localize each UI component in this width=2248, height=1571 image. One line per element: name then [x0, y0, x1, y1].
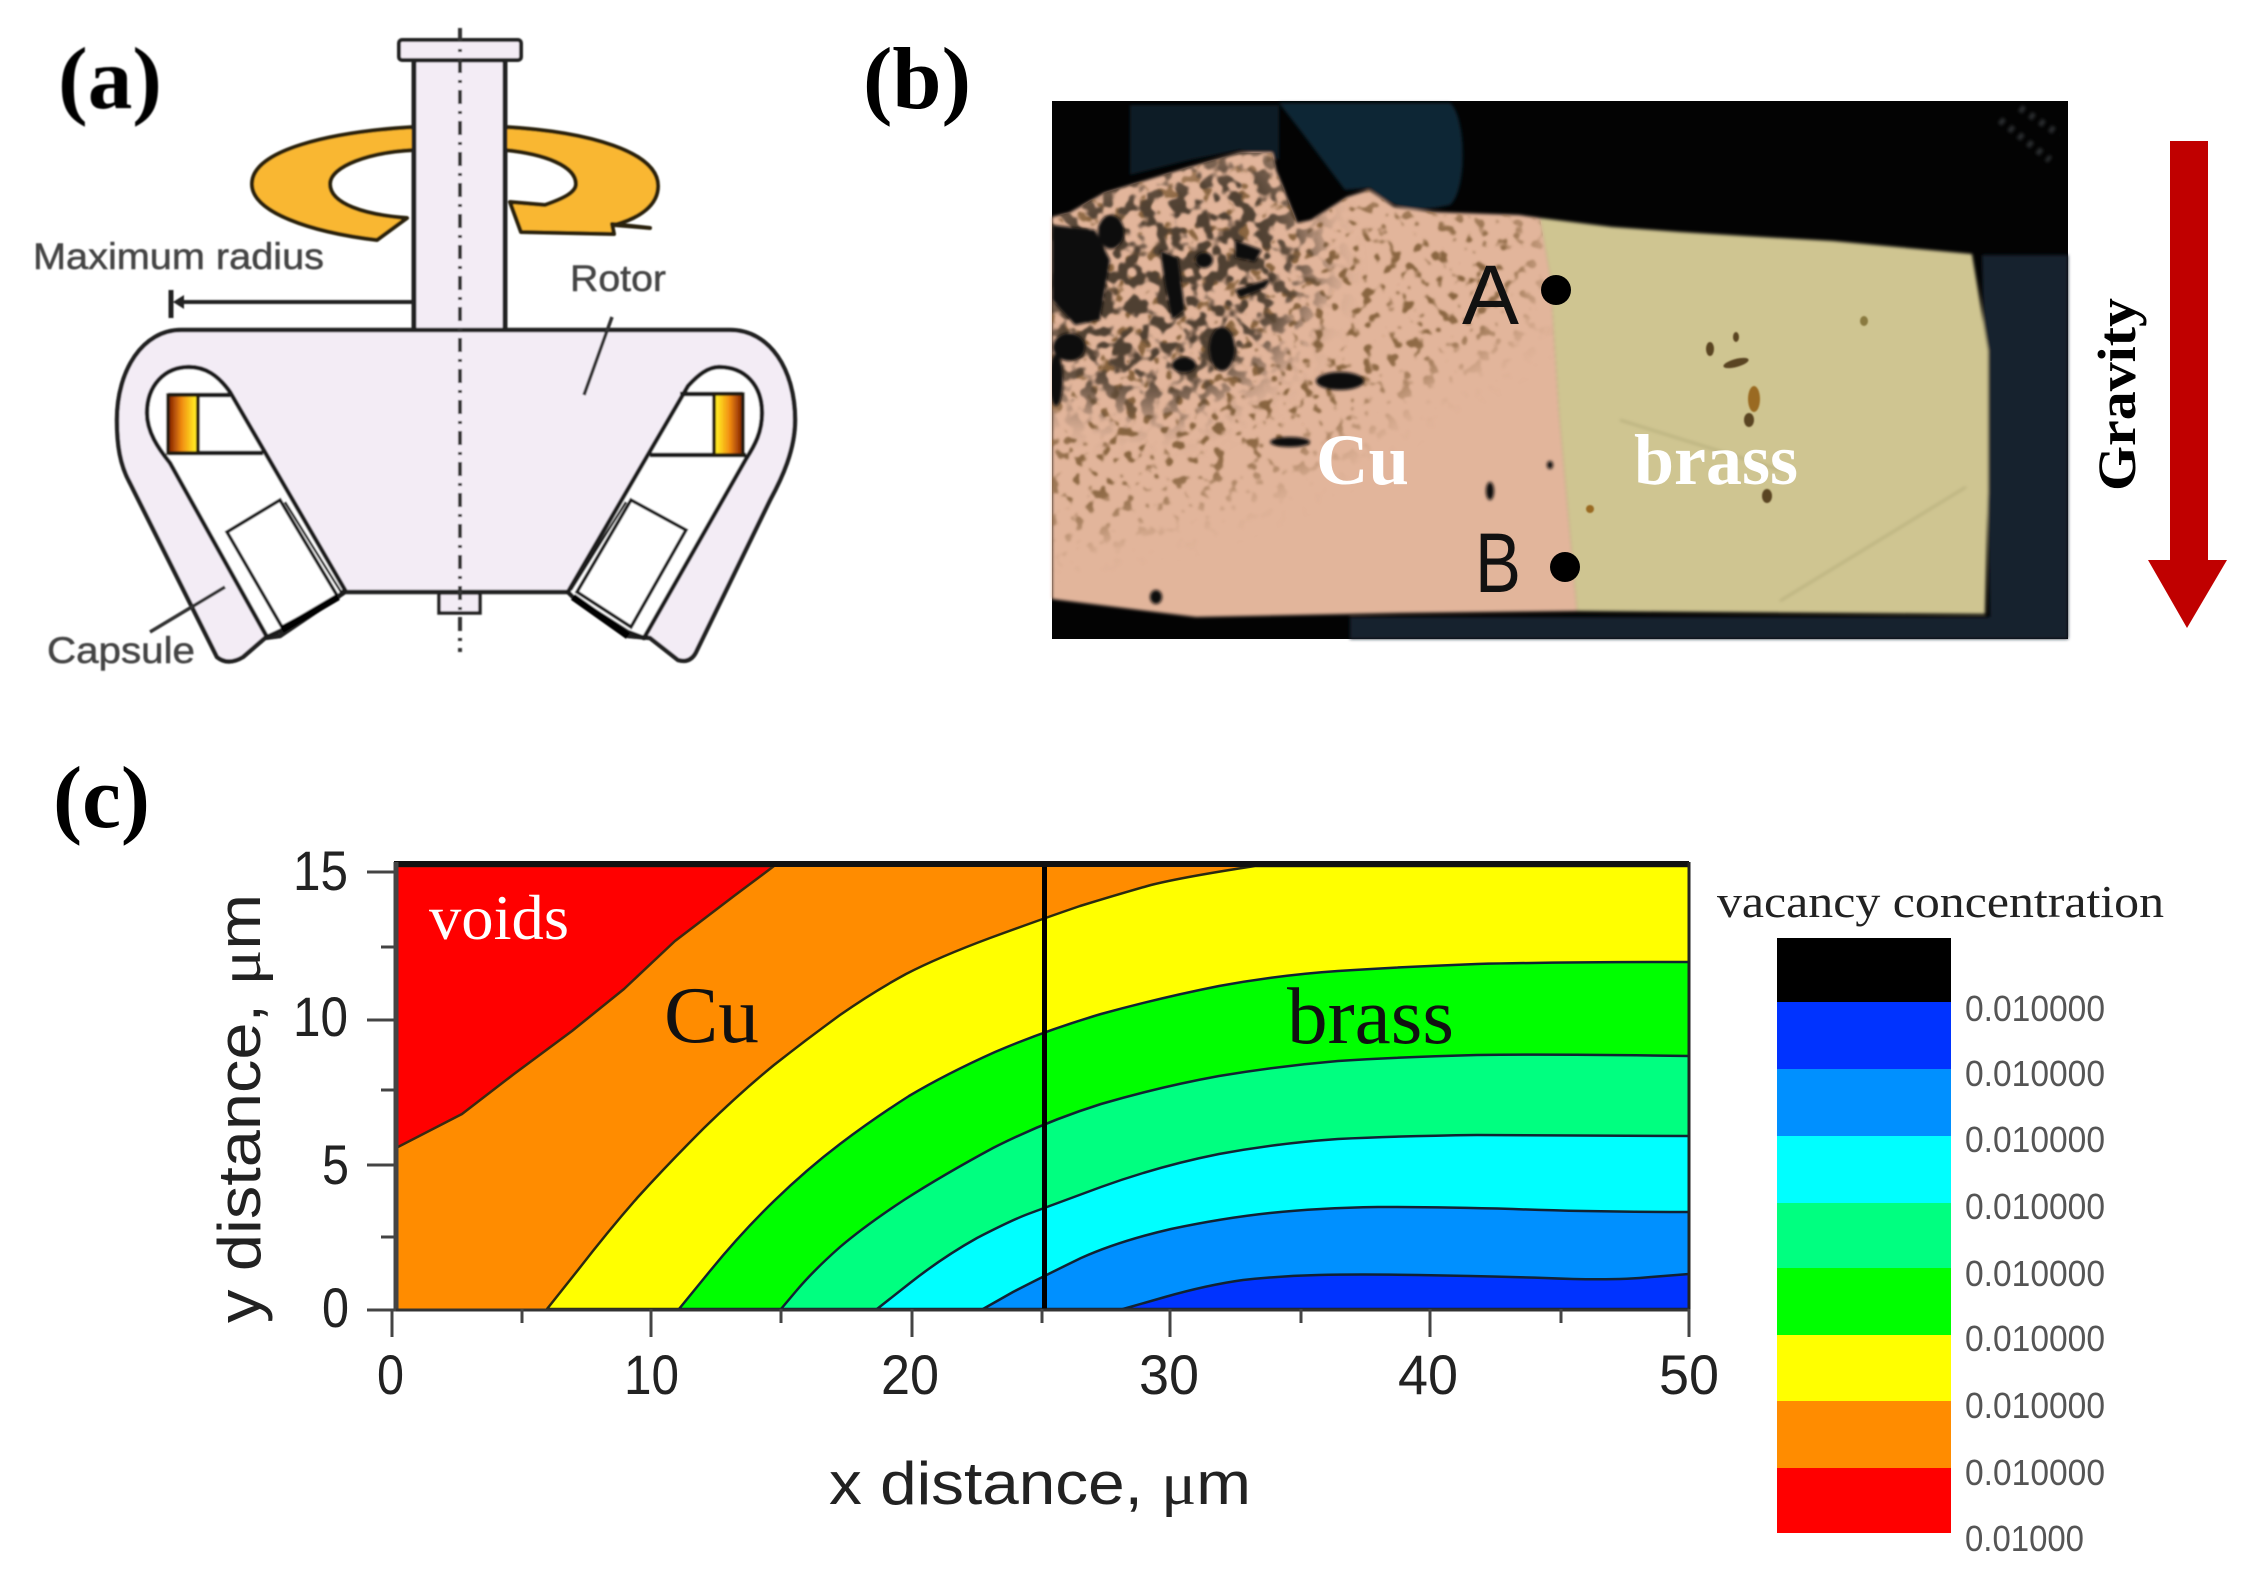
x axis tick labels: 50: [1659, 1343, 1719, 1406]
plot frame: [394, 862, 1689, 1311]
band: blue: [983, 1207, 1689, 1309]
label: gravity: Gravity: [2087, 298, 2147, 491]
legend values: 0.010000: [1965, 1053, 2105, 1094]
interface line at x = 25: [1042, 866, 1047, 1309]
y axis tick labels: 5: [322, 1133, 349, 1196]
panel: (a) rotor schematic: [33, 28, 795, 671]
legend values: [1965, 988, 2105, 1559]
y axis title: y distance, μm: [206, 894, 273, 1323]
point A marker: [1541, 275, 1571, 305]
point B marker: [1550, 552, 1580, 582]
scratches: [1620, 420, 1966, 601]
legend values: 0.01000: [1965, 1518, 2084, 1559]
label: brass: brass: [1634, 420, 1798, 500]
label: Cu: Cu: [664, 972, 759, 1060]
arrow: maximum radius: [171, 290, 412, 318]
label: brass: brass: [1287, 973, 1454, 1061]
label: A: A: [1462, 248, 1519, 342]
panel: (c) vacancy concentration contour plot: [53, 750, 2164, 1559]
bottom bolt: [439, 593, 480, 613]
y axis tick labels: [293, 839, 349, 1339]
icon: orange rotation arrow, left part: [252, 127, 414, 240]
copper region: [1052, 153, 1577, 617]
contour chart: [394, 862, 1689, 1311]
capsule leader line: [150, 587, 225, 632]
x axis tick labels: 40: [1398, 1343, 1458, 1406]
rotor shaft: [414, 60, 505, 332]
heading: (c): (c): [53, 750, 150, 847]
band: teal: [781, 1055, 1689, 1309]
y axis tick labels: 15: [293, 839, 348, 902]
label: rotor: Rotor: [570, 258, 666, 299]
legend values: 0.010000: [1965, 1253, 2105, 1294]
label: B: B: [1475, 516, 1521, 610]
band: yellow: [547, 866, 1689, 1309]
label: voids: voids: [429, 882, 569, 953]
shaft cap: [399, 40, 521, 60]
band: dark blue: [1123, 1274, 1689, 1309]
heading: (b): (b): [863, 31, 971, 128]
legend values: 0.010000: [1965, 1318, 2105, 1359]
left slot: [147, 367, 345, 637]
rotor leader line: [584, 317, 612, 395]
x axis title: x distance, μm: [829, 1450, 1251, 1517]
x axis tick labels: 0: [377, 1343, 404, 1406]
label: capsule: Capsule: [47, 630, 195, 671]
legend title: vacancy concentration: [1717, 876, 2164, 927]
x axis tick labels: 20: [881, 1343, 939, 1406]
label: maximum radius: Maximum radius: [33, 236, 324, 277]
rotor body: [117, 330, 795, 662]
arrow: gravity direction: [2148, 141, 2227, 628]
centre line: [458, 28, 462, 652]
x axis ticks: [392, 1309, 1689, 1337]
legend values: 0.010000: [1965, 1452, 2105, 1493]
icon: orange rotation arrow, right part: [505, 127, 658, 234]
panel: (b) Cu/brass micrograph: [863, 31, 2227, 639]
band: orange base: [396, 866, 1689, 1309]
band: red voids: [396, 866, 774, 1148]
right slot: [568, 367, 762, 638]
legend: vacancy concentration: [1717, 876, 2164, 1559]
legend values: 0.010000: [1965, 1186, 2105, 1227]
band: cyan: [877, 1135, 1689, 1309]
x axis tick labels: 30: [1139, 1343, 1199, 1406]
faint marks in top-right corner: [2000, 108, 2060, 160]
micrograph photo: [1040, 101, 2068, 639]
y axis tick labels: 0: [322, 1276, 349, 1339]
porous voids in copper: [1052, 153, 1556, 606]
brass region: [1540, 218, 1988, 614]
y axis ticks: [367, 872, 396, 1310]
legend values: 0.010000: [1965, 1385, 2105, 1426]
heading: (a): (a): [58, 31, 162, 128]
band: green: [679, 962, 1689, 1309]
y axis tick labels: 10: [293, 985, 348, 1048]
legend values: 0.010000: [1965, 988, 2105, 1029]
x axis tick labels: 10: [624, 1343, 679, 1406]
legend colour bar: [1777, 938, 1951, 1533]
legend values: 0.010000: [1965, 1119, 2105, 1160]
label: Cu: Cu: [1316, 420, 1409, 500]
x axis tick labels: [377, 1343, 1719, 1406]
specks in brass: [1586, 316, 1868, 513]
